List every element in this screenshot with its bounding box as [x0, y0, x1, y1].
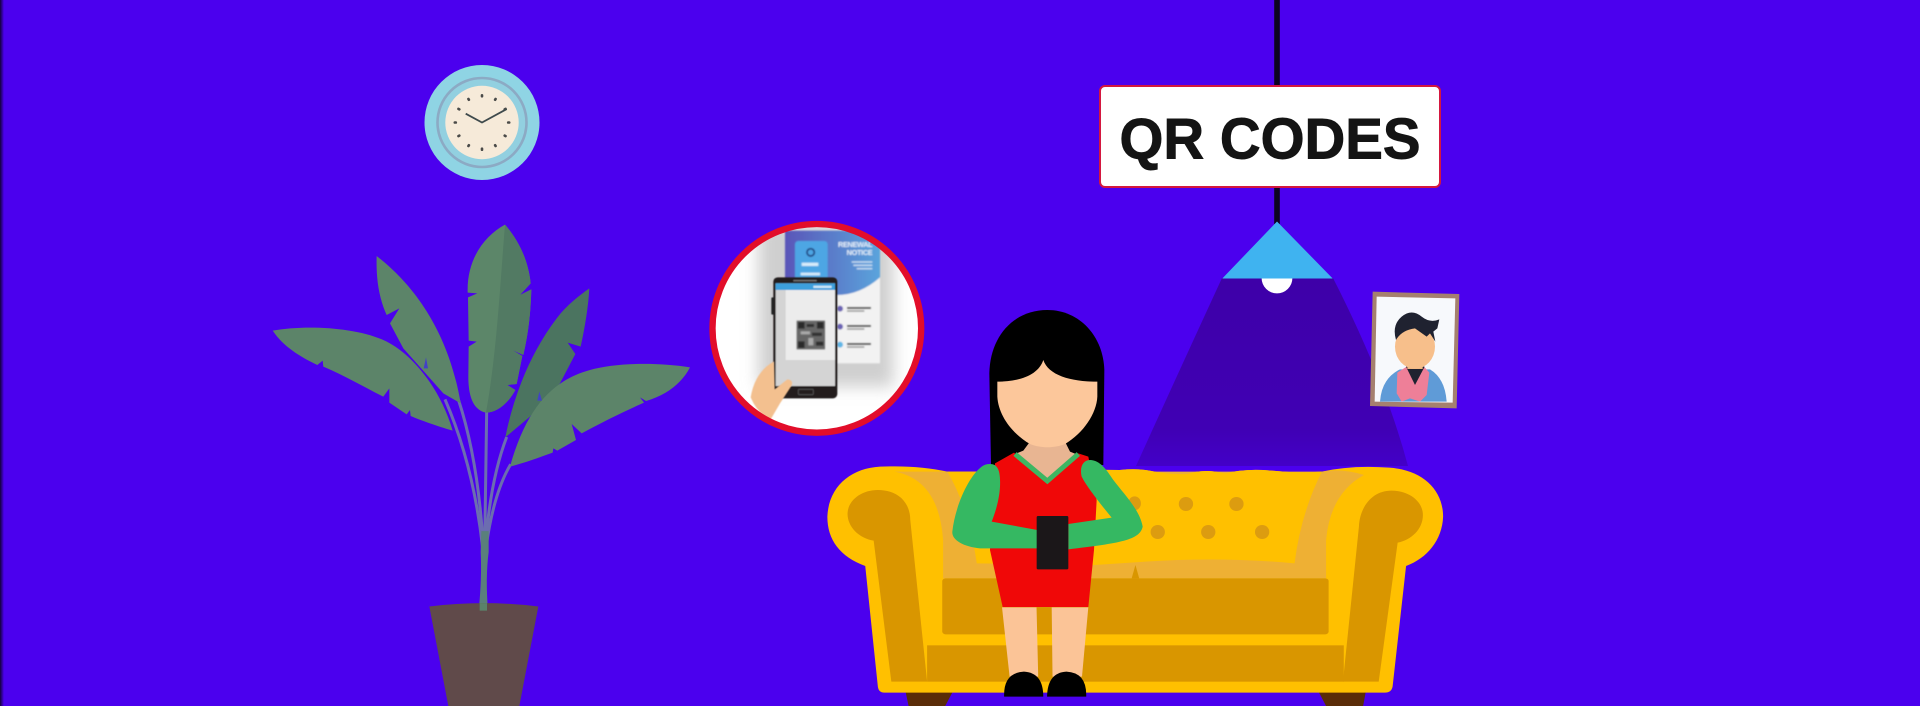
- plant trunk base: [480, 603, 487, 611]
- portrait vest: [1397, 367, 1429, 402]
- sign text: QR CODES: [1120, 108, 1420, 172]
- phone: [771, 277, 837, 398]
- legs and shoes: [1002, 607, 1088, 697]
- plant leaf: centre shade: [486, 225, 531, 413]
- sofa arm left: [848, 490, 927, 682]
- plant trunk: [479, 531, 489, 611]
- sofa body: [827, 466, 1443, 693]
- plant stems: [445, 399, 511, 548]
- sofa arm right: [1343, 491, 1423, 682]
- lamp shade: [1222, 222, 1333, 278]
- badge contents: [751, 223, 893, 419]
- lamp cord: [1274, 0, 1280, 224]
- sofa front panel: [927, 645, 1344, 682]
- hand: [751, 361, 792, 419]
- dress collar: [1015, 454, 1078, 481]
- dress: [990, 453, 1097, 607]
- hair: [989, 310, 1104, 465]
- lamp bulb: [1262, 278, 1292, 293]
- plant leaf: upper right: [505, 288, 589, 437]
- portrait shoulders: [1380, 369, 1447, 402]
- portrait neck and collar: [1406, 367, 1425, 385]
- poster heading: RENEWAL: [838, 240, 873, 249]
- portrait hair: [1395, 312, 1439, 342]
- sofa: [827, 466, 1443, 706]
- plant pot: [429, 603, 538, 706]
- sofa back: [895, 471, 1364, 578]
- plant leaf: right large: [510, 364, 690, 467]
- arm right: [1068, 460, 1143, 549]
- illustration: living room scene: [0, 0, 1460, 706]
- plant in pot: [273, 225, 690, 706]
- plant leaf: left large: [273, 328, 453, 431]
- plant leaf: centre: [468, 225, 531, 413]
- sofa legs: [905, 690, 1366, 706]
- poster: [785, 231, 880, 363]
- picture frame: [1370, 292, 1459, 408]
- woman on sofa: [952, 310, 1143, 697]
- face: [997, 360, 1097, 447]
- tufted cushion: [947, 469, 1322, 565]
- plant leaf: upper left: [377, 256, 461, 403]
- QR scan badge: [712, 223, 921, 433]
- badge ring: [712, 224, 921, 433]
- portrait head: [1395, 325, 1435, 369]
- poster list items: [837, 306, 843, 312]
- plant leaf: left notch: [424, 357, 428, 368]
- seat cushion: [942, 578, 1329, 634]
- sign: QR CODES: [1100, 86, 1440, 187]
- neck: [1015, 442, 1078, 482]
- poster heading line 2: NOTICE: [847, 248, 873, 257]
- arm left: [952, 464, 1037, 548]
- poster phone: [795, 241, 828, 283]
- phone in hand: [1037, 516, 1068, 569]
- plant leaf: right notch: [537, 392, 542, 401]
- icon: wall clock: [424, 65, 540, 180]
- lamp light cone: [1136, 278, 1408, 466]
- QR code: [797, 321, 825, 349]
